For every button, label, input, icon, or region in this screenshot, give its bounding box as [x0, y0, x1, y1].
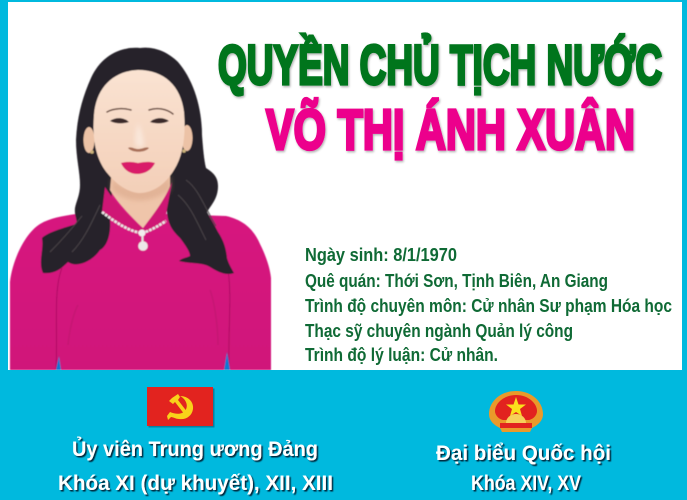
portrait: nose — [128, 122, 149, 152]
biography text: Ngày sinh: 8/1/1970 — [305, 245, 457, 265]
biography text — [305, 245, 672, 365]
title — [218, 33, 662, 162]
portrait: mouth — [121, 162, 155, 174]
portrait: neck — [110, 168, 170, 228]
biography text: Trình độ lý luận: Cử nhân. — [305, 345, 498, 365]
icon: national emblem — [489, 391, 543, 432]
national assembly text: Đại biểu Quốc hội — [436, 442, 611, 465]
portrait: eyebrows — [107, 109, 173, 114]
national assembly text: Khóa XIV, XV — [471, 472, 581, 495]
portrait: earrings — [90, 149, 186, 154]
portrait: eyes — [110, 118, 169, 123]
icon: party flag — [147, 387, 214, 428]
biography text: Thạc sỹ chuyên ngành Quản lý công — [305, 321, 573, 341]
party membership text — [58, 437, 333, 495]
portrait: necklace — [102, 212, 166, 251]
portrait: blue gaps — [56, 352, 230, 370]
portrait: collar — [102, 182, 172, 232]
bottom band — [0, 370, 687, 500]
portrait: dress — [10, 182, 271, 370]
portrait: hair — [41, 48, 234, 274]
portrait: ears — [84, 125, 192, 153]
party membership text: Ủy viên Trung ương Đảng — [72, 437, 318, 461]
party membership text: Khóa XI (dự khuyết), XII, XIII — [58, 472, 333, 495]
portrait photo — [10, 48, 271, 370]
biography text: Quê quán: Thới Sơn, Tịnh Biên, An Giang — [305, 271, 608, 291]
portrait: hair highlights — [50, 180, 216, 252]
portrait: face — [94, 70, 185, 193]
national assembly text — [436, 442, 611, 495]
portrait: neck shadow — [112, 176, 170, 200]
portrait: sleeve seams — [56, 268, 230, 370]
icon: hammer and sickle — [167, 394, 193, 420]
